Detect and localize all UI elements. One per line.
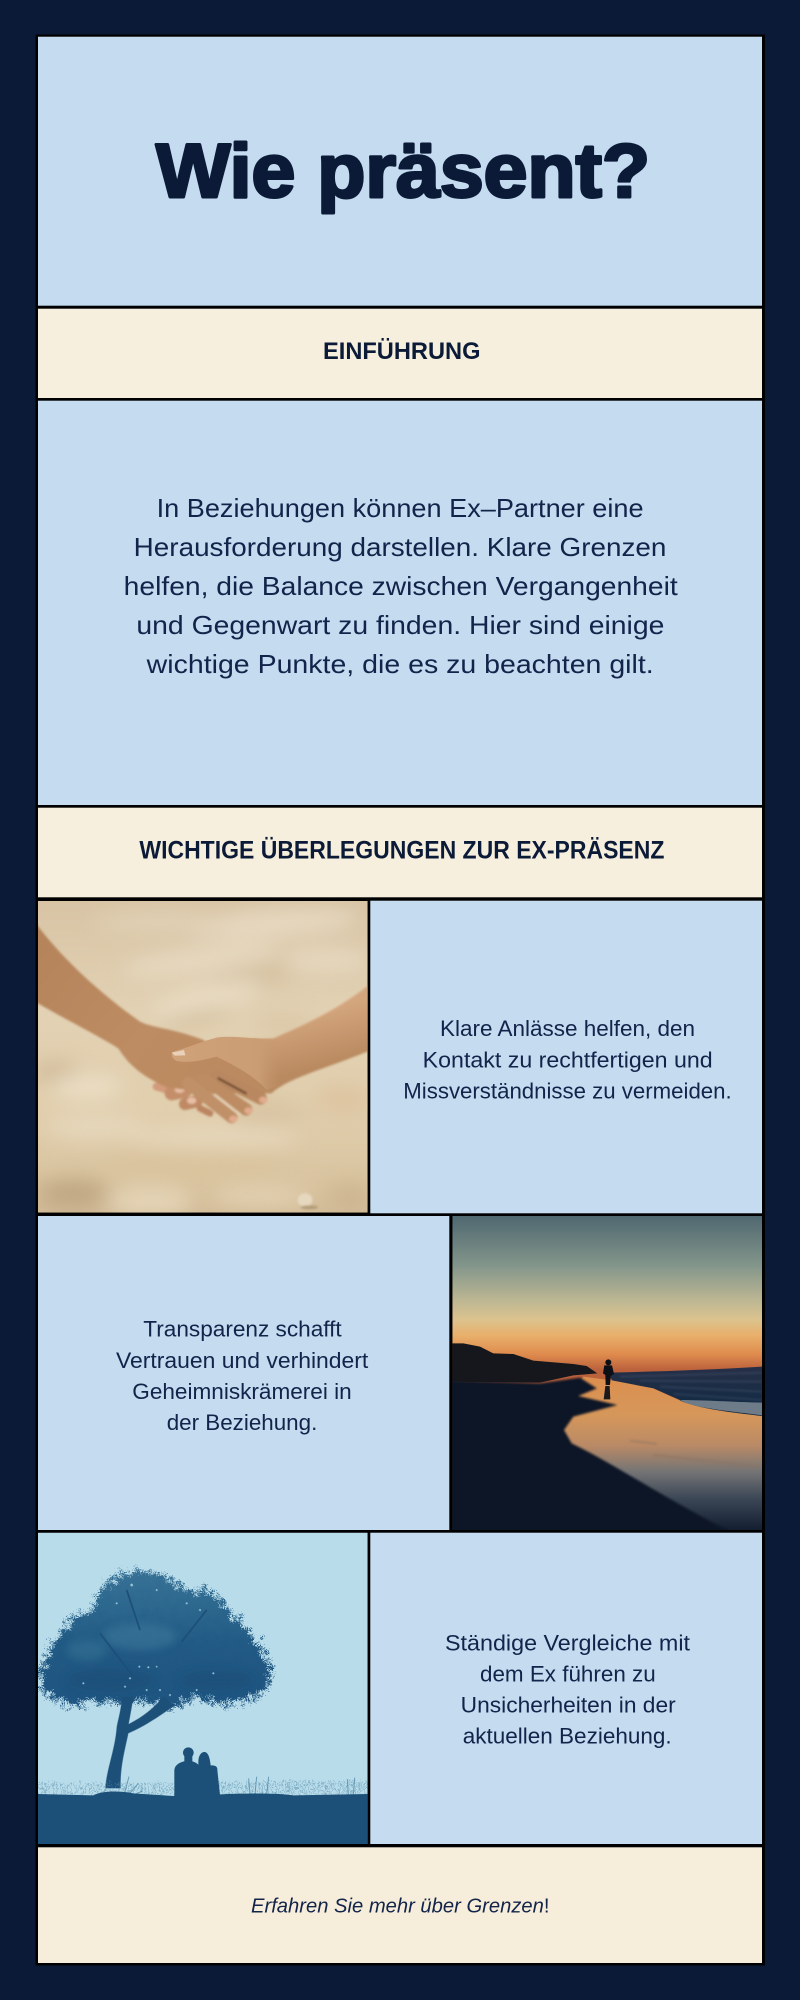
curled fingers <box>157 1087 167 1089</box>
text block: comparisons: aktuellen Beziehung. <box>463 1723 672 1748</box>
text block: clear occasions: Missverständnisse zu vermeiden. <box>403 1078 732 1103</box>
foliage shading <box>70 1624 212 1698</box>
heading: considerations: WICHTIGE ÜBERLEGUNGEN ZUR EX-PRÄSENZ <box>139 835 664 864</box>
panel: text comparisons <box>370 1533 762 1844</box>
call to action: Erfahren Sie mehr über Grenzen! <box>251 1894 550 1917</box>
text block: comparisons <box>445 1631 691 1748</box>
text block: clear occasions <box>403 1016 732 1103</box>
panel: text clear occasions <box>370 901 762 1213</box>
text block: transparency: Transparenz schafft <box>143 1317 342 1342</box>
ground <box>38 1792 370 1847</box>
grass <box>38 1777 370 1795</box>
text block: clear occasions: Kontakt zu rechtfertigen und <box>423 1047 713 1072</box>
text block: transparency: der Beziehung. <box>167 1410 317 1435</box>
dark sand <box>452 1376 726 1530</box>
trunk <box>105 1697 175 1788</box>
text block: introduction: Herausforderung darstellen. Klare Grenzen <box>134 532 666 562</box>
text block: clear occasions: Klare Anlässe helfen, den <box>440 1016 695 1041</box>
left arm, hand <box>33 920 263 1093</box>
text block: introduction: und Gegenwart zu finden. Hier sind einige <box>136 610 664 640</box>
panel: introduction text <box>38 401 762 805</box>
leaf gaps and branches <box>82 1584 214 1696</box>
couple <box>174 1747 220 1797</box>
walker <box>605 1359 611 1365</box>
photo: holding hands on sand <box>33 901 373 1216</box>
panel: introduction heading <box>38 309 762 398</box>
panel: footer <box>38 1847 762 1963</box>
text block: introduction: wichtige Punkte, die es zu beachten gilt. <box>146 649 654 679</box>
text block: transparency <box>116 1317 369 1435</box>
photo: person walking on beach at sunset <box>443 1216 767 1540</box>
text block: introduction: helfen, die Balance zwischen Vergangenheit <box>124 571 679 601</box>
wet sand <box>560 1377 767 1537</box>
left fingers <box>236 1092 268 1106</box>
panel: title <box>38 37 762 306</box>
headland <box>447 1343 597 1383</box>
text block: comparisons: Unsicherheiten in der <box>461 1692 676 1717</box>
text block: comparisons: dem Ex führen zu <box>480 1662 656 1687</box>
foliage <box>42 1573 267 1703</box>
title: Wie präsent? <box>156 129 650 214</box>
text block: transparency: Geheimniskrämerei in <box>132 1379 352 1404</box>
panel: considerations heading <box>38 808 762 897</box>
panel: text transparency <box>38 1216 449 1530</box>
text block: introduction <box>124 493 679 679</box>
photo: tree and couple silhouette <box>38 1533 370 1847</box>
text block: comparisons: Ständige Vergleiche mit <box>445 1631 691 1656</box>
right arm and palm <box>203 984 370 1093</box>
text block: transparency: Vertrauen und verhindert <box>116 1348 369 1373</box>
text block: introduction: In Beziehungen können Ex–Partner eine <box>157 493 644 523</box>
heading: Einführung: EINFÜHRUNG <box>323 338 480 365</box>
thumb <box>172 1037 280 1090</box>
sea <box>607 1367 762 1404</box>
